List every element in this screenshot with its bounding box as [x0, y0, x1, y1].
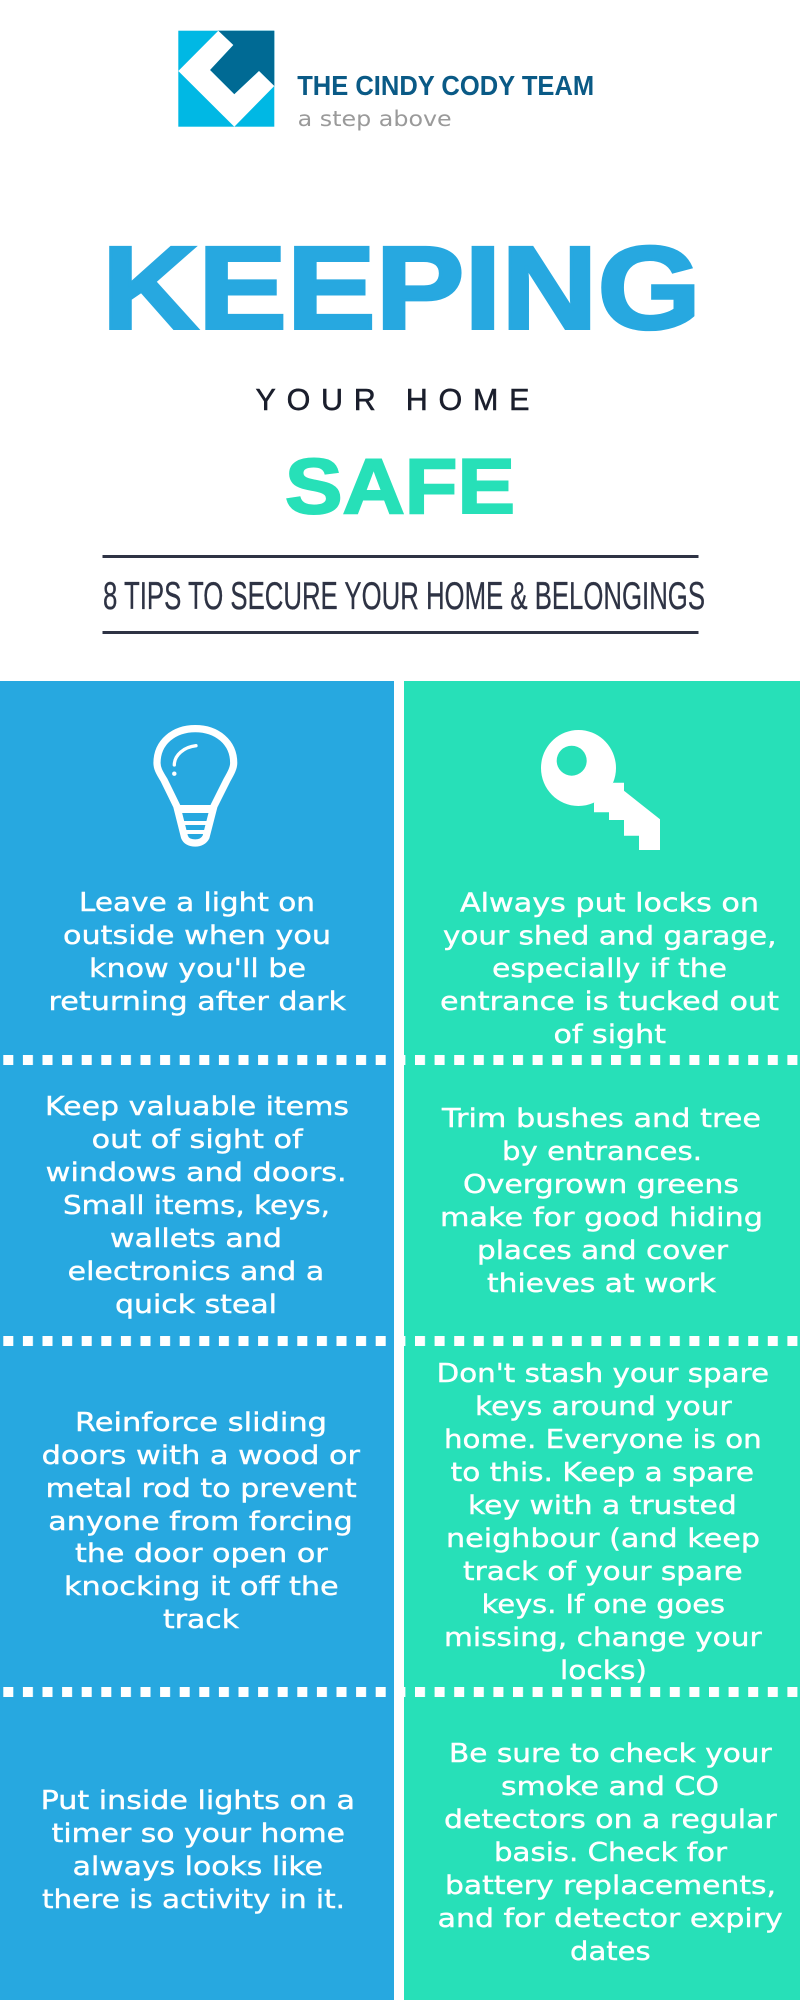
tip: leave a light on: Leave a light on: [79, 888, 315, 918]
tip: lights on a timer: timer so your home: [52, 1819, 345, 1849]
tip: reinforce sliding doors: anyone from forcing: [48, 1507, 353, 1537]
tip: reinforce sliding doors: doors with a wood or: [42, 1441, 360, 1471]
tip: do not stash spare keys: home. Everyone is on: [444, 1425, 762, 1455]
tip: check smoke and CO detectors: [438, 1739, 783, 1967]
panel: left blue column: [0, 681, 394, 2000]
tip: do not stash spare keys: [437, 1359, 769, 1686]
tip: keep valuables out of sight: out of sight of: [92, 1125, 304, 1155]
tip: locks on shed and garage: of sight: [554, 1020, 666, 1050]
tip: do not stash spare keys: locks): [560, 1656, 647, 1686]
title: KEEPING: KEEPING: [102, 222, 701, 354]
tip: leave a light on: returning after dark: [48, 987, 346, 1017]
tip: reinforce sliding doors: the door open or: [75, 1539, 328, 1569]
tip: keep valuables out of sight: Keep valuable items: [45, 1092, 349, 1122]
tip: lights on a timer: Put inside lights on a: [41, 1786, 355, 1816]
tip: trim bushes and trees: make for good hiding: [440, 1203, 763, 1233]
tip: trim bushes and trees: Overgrown greens: [463, 1170, 739, 1200]
tip: do not stash spare keys: to this. Keep a spare: [451, 1458, 754, 1488]
tip: locks on shed and garage: entrance is tucked out: [440, 987, 779, 1017]
tip: keep valuables out of sight: [45, 1092, 349, 1320]
panel: right green column: [404, 681, 800, 2000]
logo name: THE CINDY CODY TEAM: [297, 70, 594, 101]
tip: do not stash spare keys: keys. If one goes: [482, 1590, 725, 1620]
tip: lights on a timer: always looks like: [73, 1852, 323, 1882]
tip: keep valuables out of sight: electronics and a: [68, 1257, 324, 1287]
tip: locks on shed and garage: [440, 888, 779, 1050]
tip: keep valuables out of sight: wallets and: [110, 1224, 282, 1254]
tip: locks on shed and garage: your shed and garage,: [443, 922, 776, 952]
tip: locks on shed and garage: especially if the: [492, 954, 727, 984]
tip: trim bushes and trees: thieves at work: [487, 1269, 716, 1299]
tip: trim bushes and trees: [440, 1104, 763, 1299]
tip: leave a light on: outside when you: [63, 921, 331, 951]
logo tagline: a step above: [298, 107, 452, 131]
tip: keep valuables out of sight: windows and doors.: [46, 1158, 347, 1188]
tip: do not stash spare keys: neighbour (and keep: [446, 1524, 760, 1554]
tip: check smoke and CO detectors: battery replacements,: [445, 1871, 776, 1901]
tip: leave a light on: know you'll be: [89, 954, 306, 984]
logo mark: [178, 31, 274, 127]
tip: lights on a timer: there is activity in it.: [42, 1885, 345, 1915]
tip: reinforce sliding doors: metal rod to prevent: [46, 1474, 357, 1504]
tip: reinforce sliding doors: Reinforce sliding: [75, 1408, 327, 1438]
tip: do not stash spare keys: key with a trusted: [468, 1491, 737, 1521]
tip: do not stash spare keys: track of your spare: [463, 1557, 743, 1587]
tip: check smoke and CO detectors: dates: [570, 1937, 651, 1967]
tip: locks on shed and garage: Always put locks on: [460, 888, 759, 918]
tip: reinforce sliding doors: knocking it off the: [64, 1572, 339, 1602]
tip: do not stash spare keys: missing, change your: [444, 1623, 762, 1653]
tip: do not stash spare keys: Don't stash your spare: [437, 1359, 769, 1389]
tip: check smoke and CO detectors: and for detector expiry: [438, 1904, 783, 1934]
tip: check smoke and CO detectors: Be sure to check your: [449, 1739, 772, 1769]
tip: check smoke and CO detectors: detectors on a regular: [444, 1805, 777, 1835]
tip: trim bushes and trees: places and cover: [477, 1236, 728, 1266]
tip: trim bushes and trees: by entrances.: [502, 1137, 702, 1167]
tip: reinforce sliding doors: track: [163, 1605, 239, 1635]
tip: check smoke and CO detectors: smoke and CO: [501, 1772, 719, 1802]
tip: do not stash spare keys: keys around your: [475, 1392, 732, 1422]
tip: keep valuables out of sight: Small items, keys,: [63, 1191, 330, 1221]
tip: lights on a timer: [41, 1786, 355, 1915]
tip: keep valuables out of sight: quick steal: [115, 1290, 277, 1320]
heading: YOUR HOME: YOUR HOME: [256, 383, 530, 417]
logo: The Cindy Cody Team: [178, 31, 594, 131]
tip: leave a light on: [48, 888, 346, 1017]
tip: check smoke and CO detectors: basis. Check for: [494, 1838, 727, 1868]
tip: reinforce sliding doors: [42, 1408, 360, 1635]
tip: trim bushes and trees: Trim bushes and tree: [441, 1104, 761, 1134]
icon: light bulb: [157, 729, 234, 843]
title: SAFE: SAFE: [285, 442, 515, 530]
icon: key: [541, 730, 660, 850]
